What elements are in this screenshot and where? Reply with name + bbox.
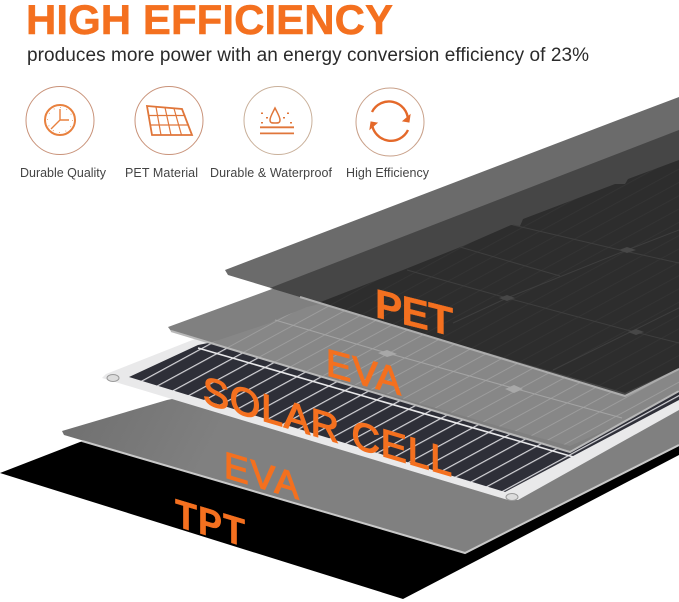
layer: lower EVA <box>62 300 679 553</box>
label: High Efficiency <box>346 166 430 180</box>
layer: upper EVA <box>168 200 679 452</box>
layer: PET <box>225 97 679 396</box>
layer: solar cell <box>102 250 679 500</box>
subtitle: produces more power with an energy conversion efficiency of 23% <box>27 45 589 66</box>
icon: solar panel <box>135 86 203 154</box>
label: Durable Quality <box>20 166 107 180</box>
label: TPT: TPT <box>175 491 245 556</box>
label: PET Material <box>125 166 198 180</box>
feature: durable quality <box>20 86 107 180</box>
icon: water drop and layers <box>244 86 312 154</box>
label: EVA lower: EVA <box>224 445 300 509</box>
label: PET: PET <box>375 280 453 345</box>
layer: TPT back sheet <box>0 300 679 599</box>
icon: cycle arrows <box>356 88 424 156</box>
label: EVA upper: EVA <box>326 342 401 404</box>
icon: clock <box>26 86 94 154</box>
label: Durable & Waterproof <box>210 166 333 180</box>
label: solar cell: SOLAR CELL <box>203 369 452 485</box>
feature: PET material <box>125 86 203 180</box>
feature: high efficiency <box>346 88 430 180</box>
feature: durable and waterproof <box>210 86 333 180</box>
